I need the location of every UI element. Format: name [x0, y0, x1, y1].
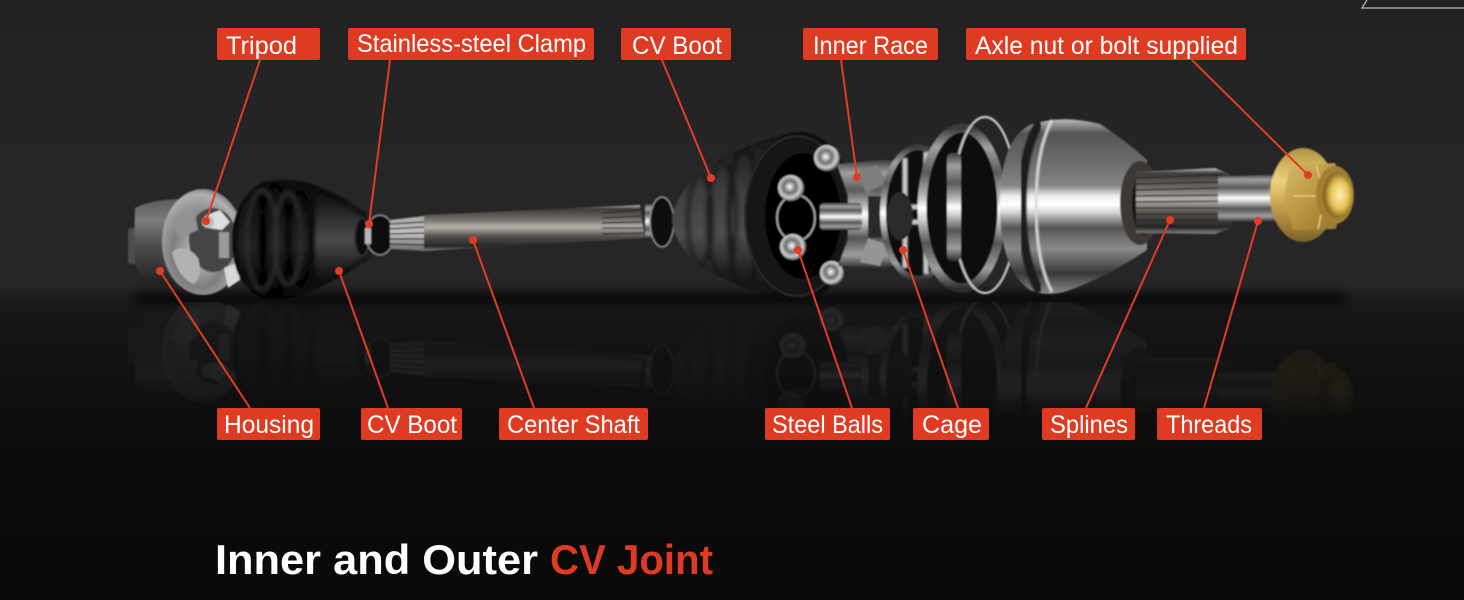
title: Inner and Outer — [215, 536, 538, 583]
label: Steel Balls: Steel Balls — [772, 411, 883, 439]
label: Tripod — [217, 28, 320, 60]
reflection of the axle — [136, 302, 1352, 404]
label: Threads: Threads — [1166, 411, 1252, 439]
label: Axle nut or bolt supplied: Axle nut or bolt supplied — [975, 32, 1238, 60]
label: Cage: Cage — [922, 411, 982, 439]
label: Center Shaft: Center Shaft — [507, 411, 640, 439]
label: Tripod: Tripod — [226, 32, 297, 60]
label: Stainless-steel Clamp: Stainless-steel Clamp — [357, 30, 586, 58]
label: Housing: Housing — [224, 411, 314, 439]
title — [215, 536, 713, 583]
leader lines and dots — [156, 60, 1312, 408]
floor shadow — [135, 294, 1345, 303]
label: Splines: Splines — [1050, 411, 1128, 439]
corner outline — [1362, 0, 1464, 8]
CV axle assembly — [128, 117, 1354, 300]
label: CV Boot top: CV Boot — [632, 32, 722, 60]
label: Inner Race: Inner Race — [813, 32, 928, 60]
title: CV Joint — [550, 536, 713, 583]
label: Cage — [913, 408, 989, 440]
label: CV Boot bottom: CV Boot — [367, 411, 457, 439]
